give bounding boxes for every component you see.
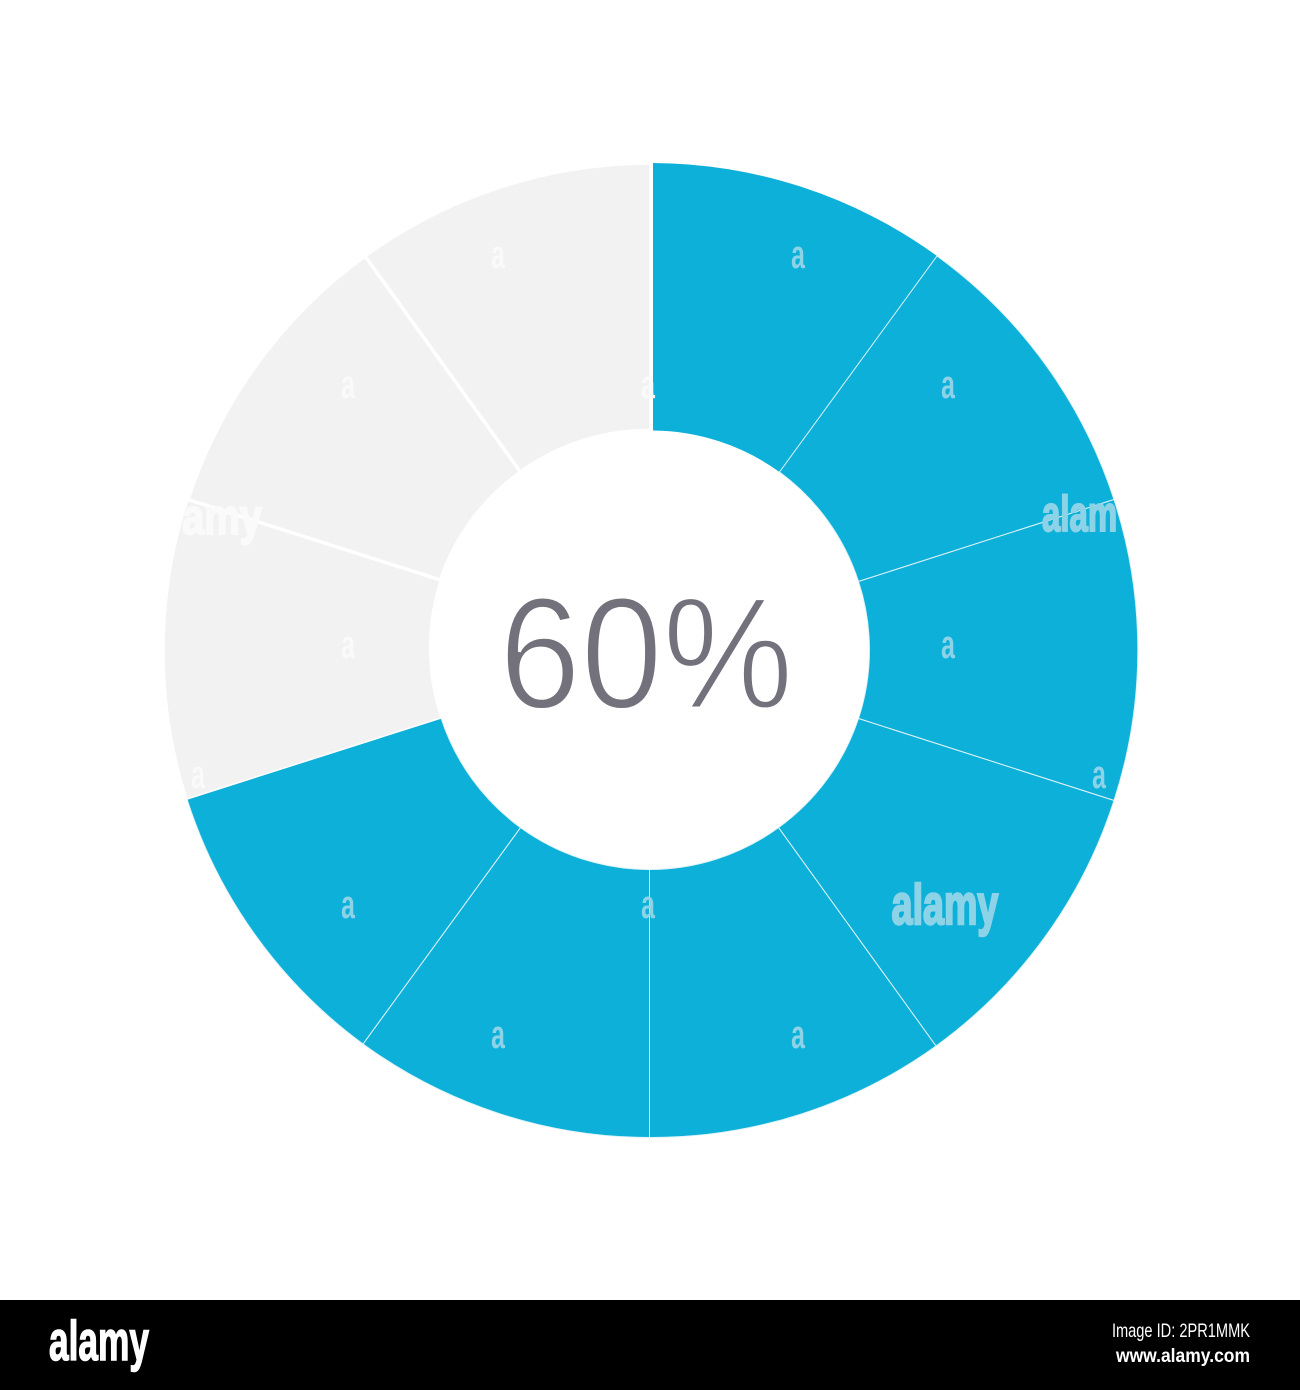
watermark: small marks on segments: a (941, 363, 955, 408)
footer bar (0, 1300, 1300, 1390)
watermark: small marks on segments: a (791, 233, 805, 278)
watermark: small marks on segments: a (191, 753, 205, 798)
watermark: small marks on segments (191, 233, 1106, 1058)
watermark: small marks on segments: a (641, 883, 655, 928)
watermark: small marks on segments: a (491, 1013, 505, 1058)
watermark: small marks on segments: a (491, 233, 505, 278)
image id: Image ID: 2PR1MMK (1112, 1320, 1251, 1341)
donut chart: 60 percent (164, 163, 1138, 1138)
website: www.alamy.com (1115, 1344, 1250, 1366)
watermark: small marks on segments: a (1092, 753, 1106, 798)
watermark: small marks on segments: a (341, 883, 355, 928)
watermark: small marks on segments: a (941, 623, 955, 668)
watermark: clipped alamy on right edge: alam (1042, 486, 1117, 542)
watermark: small marks on segments: a (791, 1013, 805, 1058)
filled segments (187, 163, 1138, 1138)
watermark: small marks on segments: a (341, 623, 355, 668)
watermark: small marks on segments: a (341, 363, 355, 408)
center value: 60% (499, 565, 793, 742)
footer logo: alamy (49, 1310, 149, 1372)
watermark: small marks on segments: a (641, 363, 655, 408)
unfilled segments (164, 163, 651, 799)
watermark: large alamy on blue segment: alamy (892, 873, 998, 937)
watermark: clipped alamy on left edge: amy (182, 489, 262, 545)
